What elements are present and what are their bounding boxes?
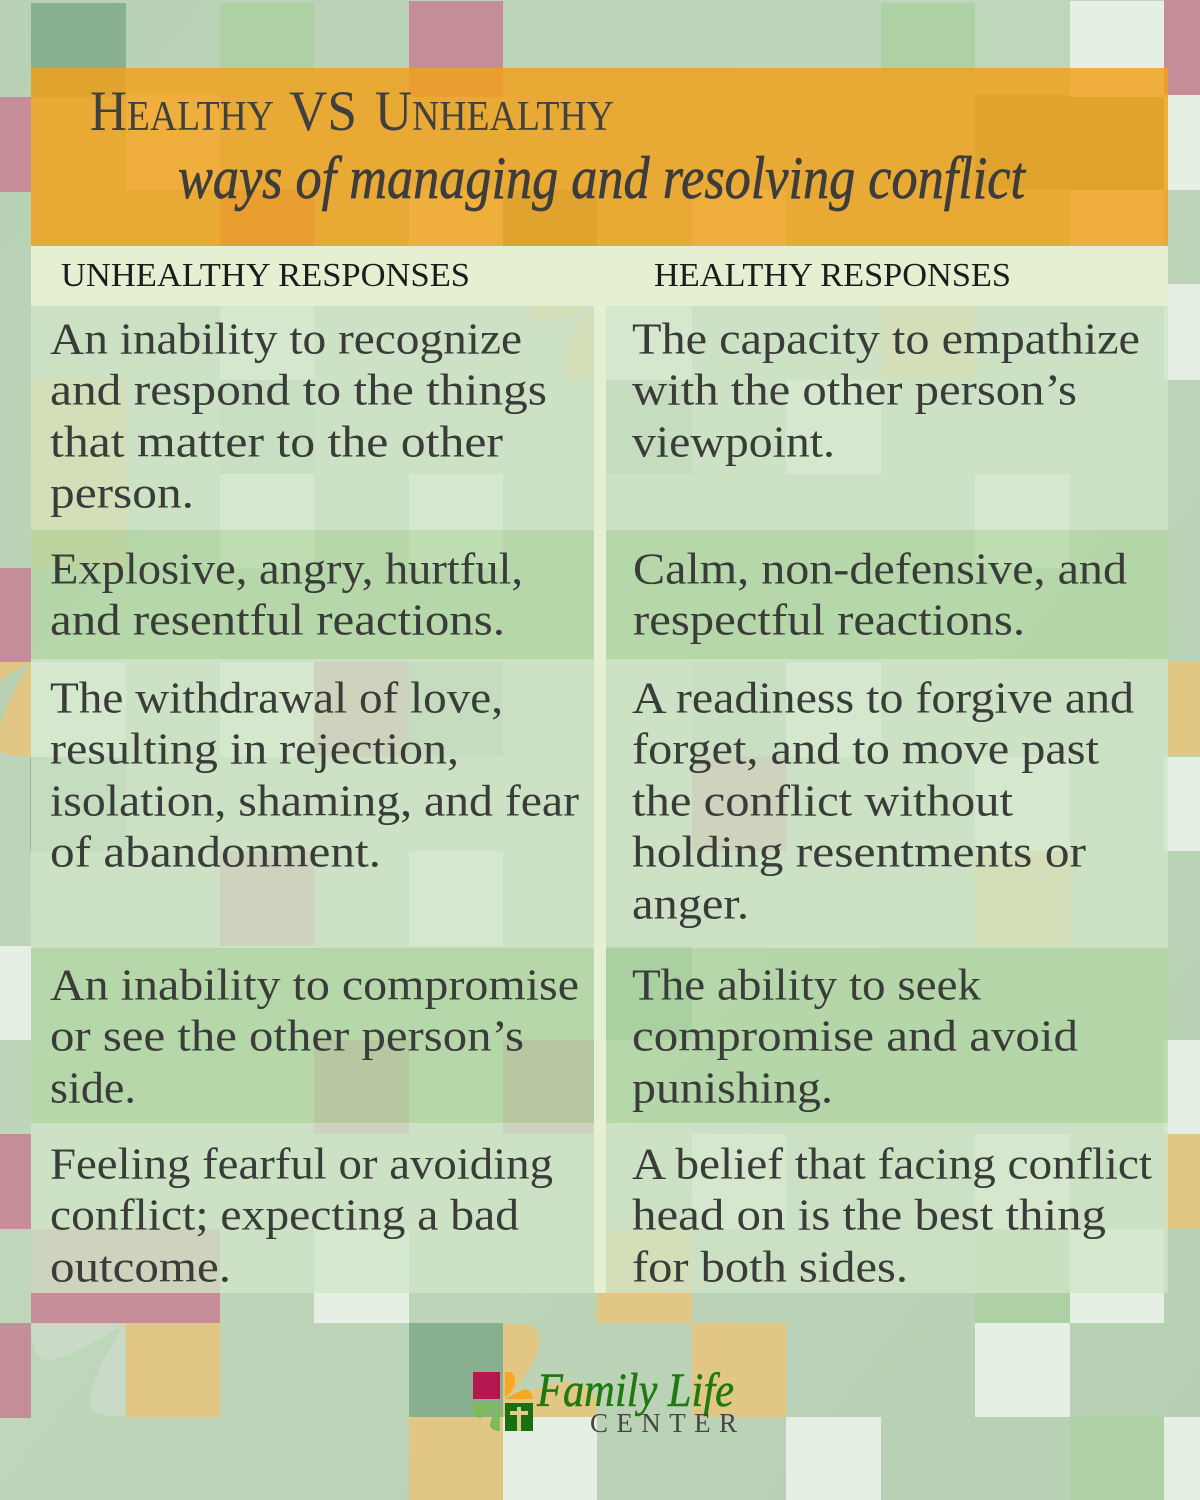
heading: Healthy VS Unhealthy: HEALTHY xyxy=(90,80,274,143)
row 3 healthy: the conflict without xyxy=(632,777,1013,826)
row 1 healthy: with the other person’s xyxy=(632,366,1077,415)
heading: Healthy VS Unhealthy: UNHEALTHY xyxy=(375,80,614,143)
panel: healthy responses column xyxy=(606,306,1168,1293)
row 3 unhealthy xyxy=(31,659,594,948)
row 4 healthy: compromise and avoid xyxy=(632,1012,1078,1061)
row 4 unhealthy xyxy=(31,948,594,1123)
row 2 healthy: Calm, non-defensive, and xyxy=(633,545,1127,594)
row 1 healthy: The capacity to empathize xyxy=(632,315,1140,364)
row 5 unhealthy xyxy=(31,1123,594,1293)
row 4 unhealthy: or see the other person’s xyxy=(50,1012,524,1061)
row 3 healthy: forget, and to move past xyxy=(632,725,1099,774)
row 3 healthy: holding resentments or xyxy=(632,828,1086,877)
row 2 healthy: respectful reactions. xyxy=(633,596,1025,645)
panel: unhealthy responses column xyxy=(31,306,594,1293)
row 1 unhealthy: An inability to recognize xyxy=(50,315,522,364)
row 4 healthy: punishing. xyxy=(632,1064,833,1113)
row 1 healthy xyxy=(606,306,1168,530)
panel: title banner xyxy=(31,68,1168,246)
column header: healthy responses: HEALTHY RESPONSES xyxy=(654,257,1011,294)
row 3 healthy: A readiness to forgive and xyxy=(632,674,1134,723)
row 2 unhealthy: and resentful reactions. xyxy=(50,596,505,645)
row 5 unhealthy: Feeling fearful or avoiding xyxy=(50,1140,553,1189)
row 1 unhealthy: that matter to the other xyxy=(50,418,503,467)
row 1 unhealthy xyxy=(31,306,594,530)
row 4 unhealthy: side. xyxy=(50,1064,136,1113)
row 4 unhealthy: An inability to compromise xyxy=(50,961,579,1010)
column header: unhealthy responses: UNHEALTHY RESPONSES xyxy=(61,257,470,294)
wordmark: Center: CENTER xyxy=(590,1408,737,1438)
row 5 unhealthy: conflict; expecting a bad xyxy=(50,1191,519,1240)
row 3 unhealthy: of abandonment. xyxy=(50,828,381,877)
heading: Healthy VS Unhealthy xyxy=(90,80,614,143)
wordmark: Family Life: Family Life xyxy=(536,1364,734,1417)
row 5 unhealthy: outcome. xyxy=(50,1243,231,1292)
row 3 unhealthy: isolation, shaming, and fear xyxy=(50,777,579,826)
logo: Family Life Center xyxy=(473,1364,737,1438)
panel: column headers xyxy=(31,246,1168,306)
row 4 healthy: The ability to seek xyxy=(632,961,981,1010)
row 5 healthy xyxy=(606,1123,1168,1293)
column divider xyxy=(594,305,606,1293)
row 1 unhealthy: person. xyxy=(50,469,194,518)
row 4 healthy xyxy=(606,948,1168,1123)
row 1 unhealthy: and respond to the things xyxy=(50,366,547,415)
row 3 unhealthy: resulting in rejection, xyxy=(50,725,459,774)
row 5 healthy: A belief that facing conflict xyxy=(632,1140,1152,1189)
heading: Healthy VS Unhealthy: VS xyxy=(289,80,357,143)
icon: four-part cross emblem xyxy=(473,1372,533,1431)
row 3 unhealthy: The withdrawal of love, xyxy=(50,674,503,723)
row 5 healthy: head on is the best thing xyxy=(632,1191,1106,1240)
row 2 unhealthy xyxy=(31,530,594,659)
subheading: ways of managing and resolving conflict: ways of managing and resolving conflict xyxy=(178,145,1026,211)
row 3 healthy: anger. xyxy=(632,880,749,929)
row 3 healthy xyxy=(606,659,1168,948)
row 1 healthy: viewpoint. xyxy=(632,418,835,467)
row 2 healthy xyxy=(606,530,1168,659)
row 2 unhealthy: Explosive, angry, hurtful, xyxy=(50,545,523,594)
row 5 healthy: for both sides. xyxy=(632,1243,908,1292)
